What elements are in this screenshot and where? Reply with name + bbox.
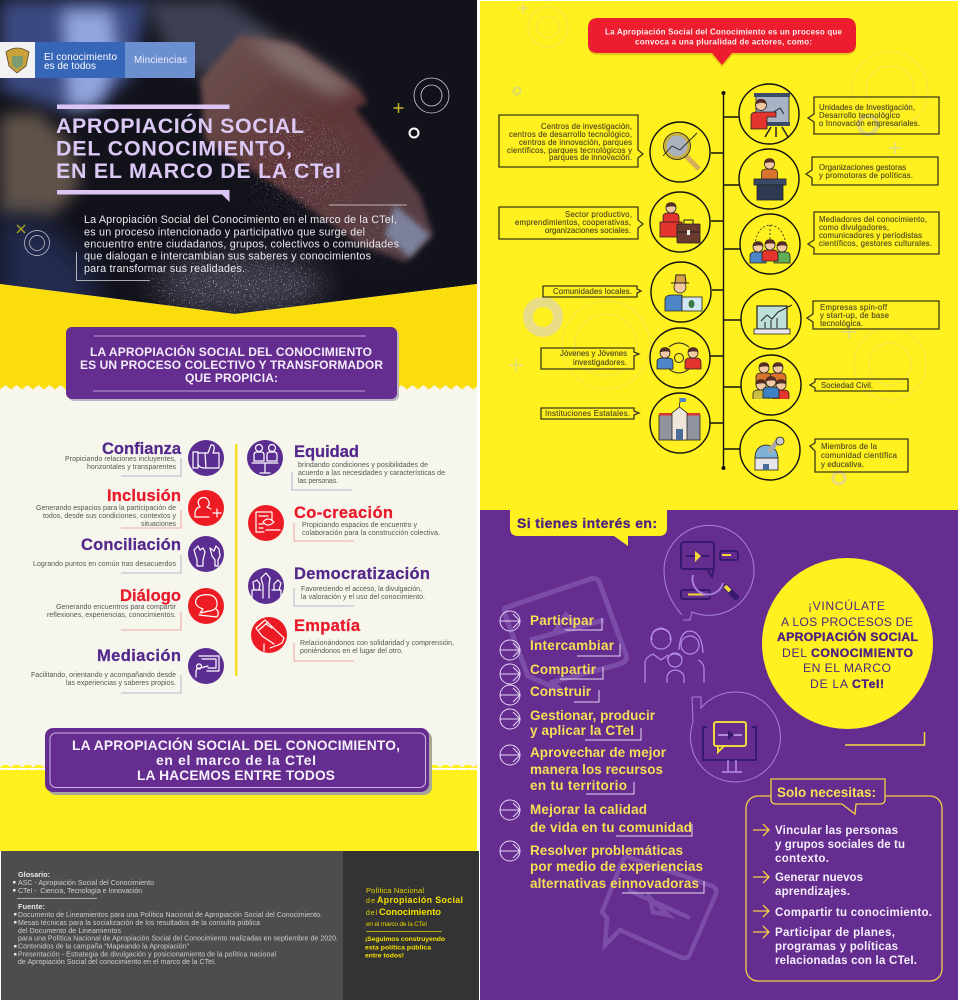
panel: glossary and sources footer: Mesas técnicas para la socialización de los resultados de la consulta pública — [18, 920, 260, 927]
list: interest items: Gestionar, producir — [530, 708, 656, 723]
illustration: family line icon — [645, 628, 704, 683]
callout: red actors intro: La Apropiación Social del Conocimiento es un proceso que — [605, 28, 843, 36]
value: Inclusión: todos, desde sus condiciones, contextos y — [43, 513, 176, 520]
panel: policy footer: ¡Seguimos construyendo — [365, 936, 445, 943]
value: Co-creación: Propiciando espacios de encuentro y — [302, 522, 418, 529]
panel: glossary and sources footer: Contenidos de la campaña “Mapeando la Apropiación” — [18, 944, 190, 950]
illustration: upper interest circle — [664, 525, 754, 620]
actor: policy organisations: y promotoras de políticas. — [819, 171, 913, 180]
actor: policy organisations — [739, 149, 938, 209]
value: Confianza: Propiciando relaciones incluyentes, — [65, 456, 176, 463]
list: interest items: Mejorar la calidad — [530, 802, 647, 817]
actor: civil society: Sociedad Civil. — [821, 381, 873, 390]
actor: local communities — [543, 262, 711, 322]
heading box: proceso colectivo: QUE PROPICIA: — [185, 371, 278, 385]
value: Equidad — [247, 440, 445, 490]
panel: policy footer: Política Nacional — [366, 886, 424, 895]
heading box: proceso colectivo: LA APROPIACIÓN SOCIAL DEL CONOCIMIENTO — [90, 344, 372, 359]
actor: scientific community — [740, 420, 908, 480]
list: interest items: alternativas einnovadoras — [530, 876, 699, 891]
list: interest items: de vida en tu comunidad — [530, 820, 692, 835]
panel: solo necesitas: Generar nuevos — [775, 872, 863, 884]
hero decorations — [17, 78, 449, 280]
panel: glossary and sources footer: ASC - Apropiación Social del Conocimiento — [18, 880, 154, 887]
banner: la hacemos entre todos: LA APROPIACIÓN SOCIAL DEL CONOCIMIENTO, — [72, 736, 400, 753]
logo bar: Minciencias — [134, 55, 187, 66]
title block — [56, 104, 341, 202]
callout: si tienes interés en: Si tienes interés en: — [517, 515, 657, 531]
callout: vincúlate yellow circle: DEL — [782, 646, 807, 660]
panel: policy footer: Conocimiento — [379, 906, 441, 917]
heading box: proceso colectivo: ES UN PROCESO COLECTIVO Y TRANSFORMADOR — [80, 358, 383, 372]
intro paragraph: La Apropiación Social del Conocimiento en el marco de la CTeI, — [84, 214, 397, 226]
actor: scientific community: comunidad científica — [821, 451, 898, 460]
panel: policy footer: entre todos! — [365, 952, 404, 960]
actor: research centres: centros de desarrollo tecnológico, — [509, 130, 632, 139]
actor: knowledge mediators: como divulgadores, — [819, 223, 889, 232]
panel: cream values area — [0, 390, 477, 768]
intro paragraph — [84, 214, 400, 275]
panel: policy footer — [343, 851, 479, 1000]
value: Empatía — [251, 617, 454, 661]
actor: investigation units — [739, 84, 939, 144]
value: Equidad: las personas. — [298, 478, 338, 485]
list: interest items: por medio de experiencias — [530, 859, 703, 874]
logo bar: es de todos — [44, 61, 96, 72]
callout: si tienes interés en — [510, 510, 667, 546]
list: interest items: Aprovechar de mejor — [530, 745, 667, 760]
panel: hero photo — [0, 0, 477, 320]
actor: productive sector — [499, 192, 710, 252]
actor: knowledge mediators — [740, 212, 939, 274]
value: Diálogo: Diálogo — [120, 587, 181, 605]
timeline spine and connectors — [710, 92, 741, 469]
actor: state institutions — [541, 393, 710, 453]
actor: spin-off companies: y start-up, de base — [820, 311, 889, 320]
callout: vincúlate yellow circle: CTeI! — [852, 677, 884, 691]
ghost speech bubble top — [504, 579, 626, 690]
callout: vincúlate yellow circle: A LOS PROCESOS DE — [781, 615, 913, 629]
actor: investigation units: o Innovación empresariales. — [819, 119, 920, 128]
actor: state institutions: Instituciones Estatales. — [545, 409, 630, 418]
panel: purple interest background — [480, 510, 958, 1000]
list: interest items: Intercambiar — [530, 638, 615, 653]
panel: policy footer: Apropiación Social — [377, 895, 463, 905]
panel: glossary and sources footer: para una Política Nacional de Apropiación Social del Conocimiento realizadas en septiembre de 2020. — [18, 936, 338, 942]
actor: spin-off companies: Empresas spin-off — [820, 303, 888, 312]
actor: productive sector: organizaciones sociales. — [545, 226, 631, 235]
callout: vincúlate yellow circle: CONOCIMIENTO — [811, 646, 913, 660]
panel: glossary and sources footer: de Apropiación Social del conocimiento en el marco de la CTeI. — [18, 959, 216, 966]
title block: DEL CONOCIMIENTO, — [56, 136, 292, 160]
panel: solo necesitas: relacionadas con la CTeI. — [775, 955, 917, 967]
illustration: lower interest circle — [690, 692, 780, 782]
actor: knowledge mediators: Mediadores del conocimiento, — [819, 215, 927, 224]
value: Empatía: poniéndonos en el lugar del otro. — [300, 648, 403, 655]
panel: glossary and sources footer: Fuente: — [18, 902, 45, 911]
panel: glossary and sources footer: Documento de Lineamientos para una Política Nacional de Apropiación Social del Conocimiento. — [18, 912, 322, 919]
panel: glossary and sources footer: del Documento de Lineamientos — [18, 928, 122, 935]
actor: research centres: parques de innovación. — [549, 153, 632, 162]
value: Confianza: Confianza — [102, 440, 182, 458]
value: Co-creación: Co-creación — [294, 504, 393, 522]
value: Democratización: Democratización — [294, 565, 430, 583]
actor: research centres: científicos, parques tecnológicos y — [507, 146, 632, 155]
intro paragraph: encuentro entre ciudadanos, grupos, colectivos o comunidades — [84, 238, 400, 250]
value: Confianza: horizontales y transparentes — [87, 464, 176, 471]
panel: glossary and sources footer: CTeI - Ciencia, Tecnología e Innovación — [18, 888, 142, 895]
actor: knowledge mediators: científicos, gestores culturales. — [819, 239, 932, 248]
value: Mediación: Facilitando, orientando y acompañando desde — [31, 672, 176, 679]
panel: left page yellow band — [0, 284, 477, 392]
actor: youth and researchers: Jóvenes y Jóvenes — [560, 349, 627, 358]
actor: spin-off companies — [741, 289, 939, 349]
actor: research centres — [499, 115, 710, 182]
panel: solo necesitas: y grupos sociales de tu — [775, 839, 905, 851]
actor: investigation units: Unidades de Investigación, — [819, 103, 915, 112]
list: interest items: en tu territorio — [530, 778, 627, 793]
panel: glossary and sources footer — [1, 851, 344, 1000]
actor: scientific community: y educativa. — [821, 460, 864, 469]
callout: red actors intro: convoca a una pluralidad de actores, como: — [635, 38, 812, 46]
actor: youth and researchers: investigadores. — [573, 358, 627, 367]
panel: solo necesitas — [746, 779, 942, 981]
panel: solo necesitas: Solo necesitas: — [777, 785, 876, 800]
banner: la hacemos entre todos — [45, 728, 432, 795]
list: interest items: y aplicar la CTeI — [530, 723, 634, 738]
value: Democratización — [248, 565, 430, 606]
value: Mediación: Mediación — [97, 647, 181, 665]
value: Conciliación — [33, 536, 224, 573]
callout: vincúlate yellow circle — [762, 558, 933, 729]
panel: solo necesitas: aprendizajes. — [775, 886, 850, 898]
panel: policy footer: de — [366, 898, 375, 905]
actor: youth and researchers — [541, 328, 710, 388]
panel: solo necesitas: Vincular las personas — [775, 825, 898, 837]
actor: spin-off companies: tecnológica. — [820, 319, 863, 328]
panel: solo necesitas: Compartir tu conocimiento. — [775, 907, 932, 919]
actor: policy organisations: Organizaciones gestoras — [819, 163, 906, 172]
value: Diálogo: reflexiones, experiencias, conocimientos. — [47, 612, 176, 619]
list: interest items: Resolver problemáticas — [530, 843, 683, 858]
list: interest items: Participar — [530, 613, 595, 628]
value: Mediación: las experiencias y saberes propios. — [66, 680, 176, 687]
value: Inclusión: Generando espacios para la participación de — [36, 505, 176, 512]
list: interest items: Construir — [530, 684, 592, 699]
value: Empatía: Relacionándonos con solidaridad y comprensión, — [300, 640, 454, 647]
panel: policy footer: esta política pública — [365, 944, 431, 952]
callout: vincúlate yellow circle: APROPIACIÓN SOCIAL — [777, 629, 919, 644]
banner: la hacemos entre todos: LA HACEMOS ENTRE TODOS — [137, 768, 335, 783]
actor: research centres: Centros de investigación, — [541, 122, 632, 131]
banner: la hacemos entre todos: en el marco de la CTeI — [156, 753, 316, 768]
actor: productive sector: emprendimientos, cooperativas, — [515, 218, 631, 227]
panel: glossary and sources footer: Presentación - Estrategia de divulgación y posicionamiento de la política nacional — [18, 952, 276, 958]
value: Co-creación: colaboración para la construcción colectiva. — [302, 530, 440, 537]
panel: glossary and sources footer: Glosario: — [18, 870, 50, 879]
callout: red actors intro — [588, 18, 856, 67]
logo bar — [0, 42, 195, 78]
value: Equidad: brindando condiciones y posibilidades de — [298, 462, 428, 469]
list: interest items: manera los recursos — [530, 762, 663, 777]
title block: APROPIACIÓN SOCIAL — [56, 113, 304, 138]
panel: solo necesitas: programas y políticas — [775, 941, 898, 953]
faded background decorations — [509, 3, 928, 484]
actor: research centres: centros de innovación, parques — [519, 138, 632, 147]
list: interest items — [500, 611, 704, 893]
callout: vincúlate yellow circle: ¡VINCÚLATE — [808, 598, 885, 613]
value: Equidad: acuerdo a las necesidades y características de — [298, 470, 445, 477]
list: interest items: Compartir — [530, 662, 597, 677]
panel: policy footer: en el marco de la CTeI — [366, 921, 427, 928]
value: Inclusión — [36, 487, 224, 528]
accent corner line — [845, 732, 924, 745]
divider: yellow centre line — [235, 444, 238, 676]
callout: vincúlate yellow circle: DE LA — [810, 677, 849, 691]
panel: solo necesitas: Participar de planes, — [775, 927, 895, 939]
actor: knowledge mediators: comunicadores y periodistas — [819, 231, 922, 240]
value: Inclusión: situaciones — [141, 521, 176, 528]
actor: scientific community: Miembros de la — [821, 442, 878, 451]
value: Conciliación: Logrando puntos en común tras desacuerdos — [33, 561, 176, 568]
actor: investigation units: Desarrollo tecnológico — [819, 111, 901, 120]
ghost speech bubble bottom — [602, 857, 716, 958]
actor: productive sector: Sector productivo, — [565, 210, 632, 219]
panel: lower yellow band — [0, 770, 477, 851]
value: Diálogo — [47, 587, 224, 630]
value: Mediación — [31, 647, 224, 693]
value: Conciliación: Conciliación — [81, 536, 181, 554]
panel: solo necesitas: contexto. — [775, 853, 829, 865]
intro paragraph: que dialogan e intercambian sus saberes y conocimientos — [84, 250, 372, 262]
title block: EN EL MARCO DE LA CTeI — [56, 159, 341, 183]
arrow markers — [500, 611, 520, 861]
panel: actors yellow background — [480, 1, 958, 510]
value: Co-creación — [248, 504, 440, 541]
actor: local communities: Comunidades locales. — [553, 287, 632, 296]
value: Equidad: Equidad — [294, 443, 359, 461]
logo bar: El conocimiento — [44, 52, 117, 63]
value: Confianza — [65, 440, 224, 476]
actor: civil society — [741, 355, 908, 415]
intro paragraph: es un proceso intencionado y participativo que surge del — [84, 226, 365, 238]
value: Diálogo: Generando encuentros para compartir — [56, 604, 177, 611]
intro paragraph: para transformar sus realidades. — [84, 263, 245, 275]
value: Empatía: Empatía — [294, 617, 361, 635]
value: Democratización: Favoreciendo el acceso, la divulgación, — [301, 586, 422, 593]
value: Democratización: la valoración y el uso del conocimiento. — [301, 594, 425, 601]
heading box: proceso colectivo — [66, 327, 399, 401]
panel: policy footer: del — [366, 910, 377, 917]
value: Inclusión: Inclusión — [107, 487, 181, 505]
callout: vincúlate yellow circle: EN EL MARCO — [803, 661, 891, 675]
